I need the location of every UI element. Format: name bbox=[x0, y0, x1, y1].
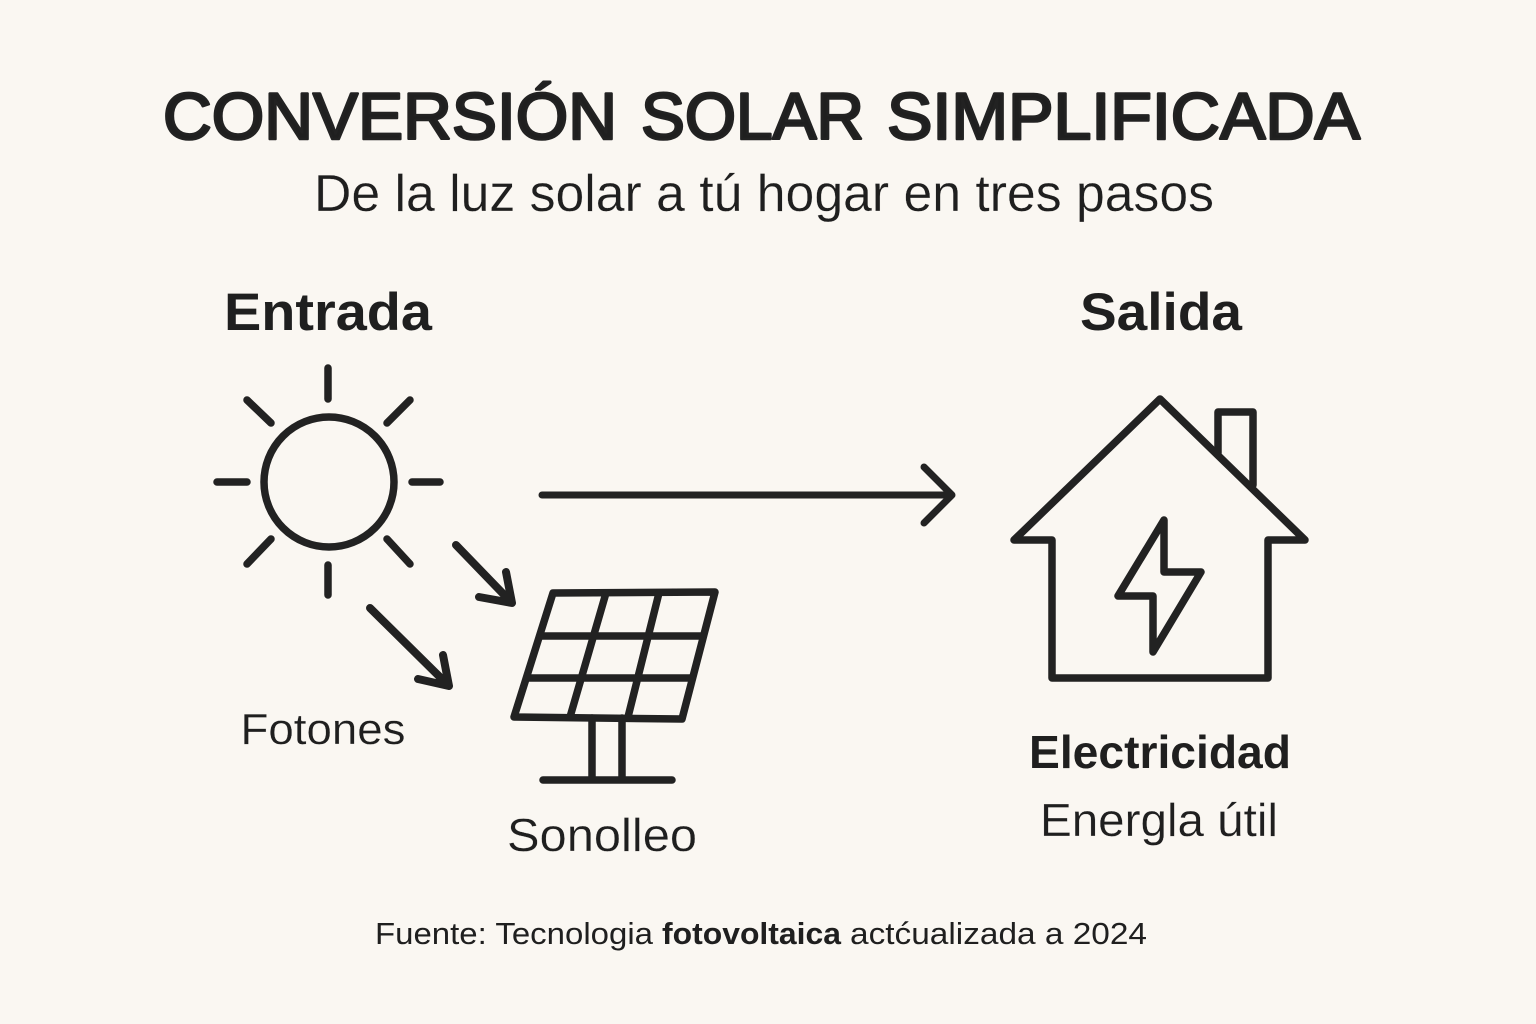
icon: sun bbox=[217, 368, 440, 595]
title bbox=[163, 79, 1360, 153]
label: Sonolleo: Sonolleo bbox=[507, 809, 697, 861]
arrow: sun to panel lower bbox=[370, 608, 449, 686]
source note bbox=[375, 916, 1147, 951]
arrow: sun to panel upper bbox=[456, 545, 512, 603]
icon: solar panel bbox=[514, 592, 715, 780]
source note: actćualizada a 2024 bbox=[850, 916, 1147, 951]
heading: Entrada: Entrada bbox=[224, 283, 433, 342]
source note: fotovoltaica bbox=[662, 916, 842, 951]
source note: Fuente: Tecnologia bbox=[375, 916, 654, 951]
title: SOLAR bbox=[641, 79, 864, 153]
icon: house with lightning bolt bbox=[1014, 399, 1305, 678]
label: Energla útil: Energla útil bbox=[1040, 794, 1278, 846]
label: Electricidad: Electricidad bbox=[1029, 726, 1291, 778]
label: Fotones: Fotones bbox=[240, 705, 406, 754]
heading: Salida: Salida bbox=[1080, 283, 1243, 342]
arrow: main to house bbox=[542, 467, 952, 523]
subtitle: De la luz solar a tú hogar en tres pasos bbox=[314, 165, 1214, 223]
title: SIMPLIFICADA bbox=[887, 79, 1360, 153]
title: CONVERSIÓN bbox=[163, 79, 617, 153]
